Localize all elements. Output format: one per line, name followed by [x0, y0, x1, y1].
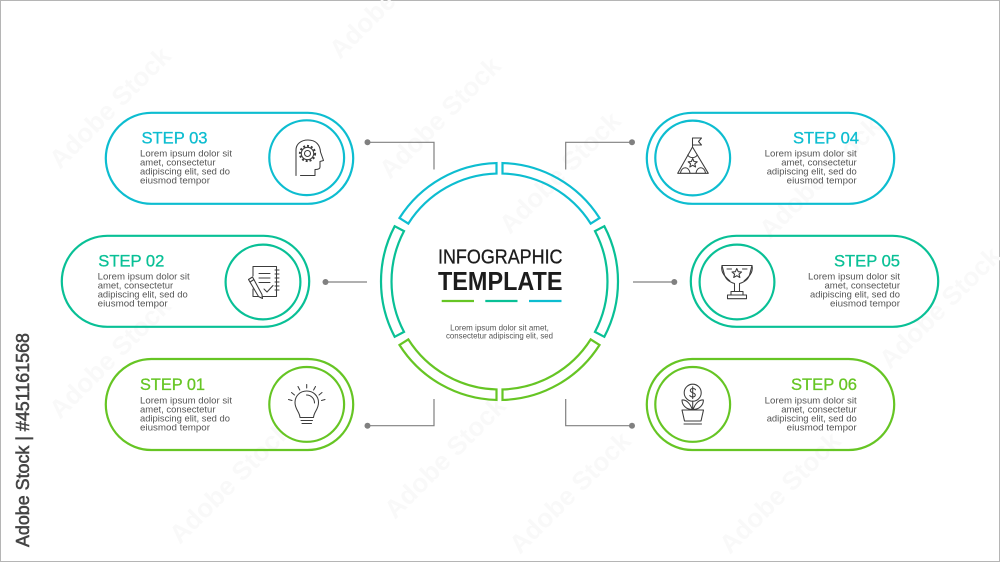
- connector: step 05: [633, 279, 677, 285]
- icon: light bulb: [288, 384, 325, 424]
- connector: step 03: [364, 139, 434, 170]
- connector: step 01: [364, 399, 434, 429]
- panel: step 04: [647, 113, 894, 204]
- connector: step 06: [566, 399, 635, 429]
- infographic canvas: Adobe Stock: [493, 105, 627, 239]
- panel: step 05: adipiscing elit, sed do: [810, 290, 900, 301]
- panel: step 03: Lorem ipsum dolor sit: [140, 149, 232, 160]
- panel: step 01: amet, consectetur: [140, 404, 216, 415]
- infographic canvas: Adobe Stock: [373, 50, 507, 184]
- panel: step 02: STEP 02: [98, 251, 164, 270]
- panel: step 03: [106, 113, 353, 204]
- central description: consectetur adipiscing elit, sed: [446, 331, 553, 341]
- panel: step 03: STEP 03: [142, 128, 208, 147]
- infographic canvas: Adobe Stock: [43, 290, 177, 424]
- panel: step 06: Lorem ipsum dolor sit: [765, 395, 857, 406]
- panel: step 06: [647, 359, 894, 450]
- central title: INFOGRAPHIC: [438, 246, 562, 268]
- panel: step 02: [62, 236, 309, 327]
- panel: step 03: eiusmod tempor: [140, 176, 210, 187]
- infographic canvas: Adobe Stock: [713, 425, 847, 559]
- panel: step 02: eiusmod tempor: [98, 299, 168, 310]
- infographic canvas: Adobe Stock: [378, 390, 512, 524]
- infographic canvas: Adobe Stock: [753, 110, 887, 244]
- panel: step 01: Lorem ipsum dolor sit: [140, 395, 232, 406]
- panel: step 05: amet, consectetur: [824, 281, 900, 292]
- panel: step 04: adipiscing elit, sed do: [767, 167, 857, 178]
- panel: step 03: amet, consectetur: [140, 158, 216, 169]
- icon: document and pen: [248, 266, 279, 298]
- panel: step 04: eiusmod tempor: [787, 176, 857, 187]
- panel: step 03: adipiscing elit, sed do: [140, 167, 230, 178]
- panel: step 06: adipiscing elit, sed do: [767, 413, 857, 424]
- infographic canvas: Adobe Stock: [43, 40, 177, 174]
- title dashes: [442, 300, 562, 302]
- central title: TEMPLATE: [438, 268, 562, 296]
- panel: step 05: eiusmod tempor: [830, 299, 900, 310]
- panel: step 01: eiusmod tempor: [140, 422, 210, 433]
- panel: step 01: adipiscing elit, sed do: [140, 413, 230, 424]
- panel: step 06: amet, consectetur: [781, 404, 857, 415]
- connector: step 04: [566, 139, 635, 170]
- central ring: [381, 163, 618, 400]
- panel: step 02: adipiscing elit, sed do: [98, 290, 188, 301]
- panel: step 04: Lorem ipsum dolor sit: [765, 149, 857, 160]
- panel: step 05: [691, 236, 938, 327]
- icon: money plant: [682, 384, 704, 424]
- central description: Lorem ipsum dolor sit amet,: [450, 323, 549, 333]
- panel: step 04: STEP 04: [793, 128, 859, 147]
- panel: step 01: [106, 359, 353, 450]
- central description: [446, 323, 553, 341]
- panel: step 02: amet, consectetur: [98, 281, 173, 292]
- panel: step 05: STEP 05: [834, 251, 900, 270]
- panel: step 01: STEP 01: [140, 375, 205, 394]
- infographic canvas: Adobe Stock: [163, 415, 297, 549]
- side credit text: Adobe Stock | #451161568: [13, 333, 33, 547]
- panel: step 06: eiusmod tempor: [787, 422, 857, 433]
- icon: mountain flag: [678, 138, 708, 173]
- panel: step 06: STEP 06: [791, 375, 857, 394]
- infographic canvas: Adobe Stock: [503, 425, 637, 559]
- panel: step 04: amet, consectetur: [781, 158, 857, 169]
- panel: step 02: Lorem ipsum dolor sit: [98, 272, 190, 283]
- icon: head with gear: [296, 140, 324, 176]
- central title: [438, 246, 562, 296]
- panel: step 05: Lorem ipsum dolor sit: [808, 272, 900, 283]
- icon: trophy: [722, 266, 752, 299]
- connector: step 02: [322, 279, 367, 285]
